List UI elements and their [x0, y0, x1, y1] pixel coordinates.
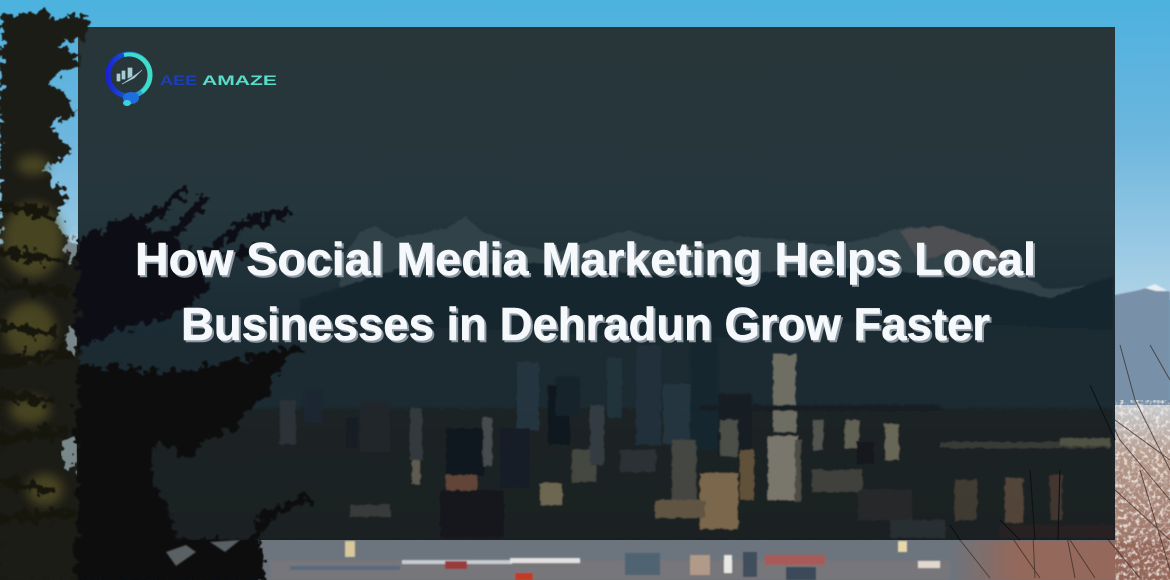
background: right side rosy foliage [1115, 405, 1170, 580]
background: base ground [0, 400, 1170, 580]
background: sky [0, 0, 1170, 300]
upper branch over panel [78, 192, 284, 352]
logo [108, 54, 277, 106]
background: speckled foliage texture [1115, 400, 1170, 580]
city skyline [80, 340, 1113, 538]
background: lower city strip [270, 541, 1170, 580]
title: Businesses in Dehradun Grow Faster [181, 298, 990, 350]
tree outside panel [0, 12, 88, 580]
frosted highlights at tree base [166, 540, 240, 566]
background: bare tree branches lower right [960, 345, 1170, 578]
lower branch over panel [76, 350, 307, 580]
bare branches inside panel [950, 385, 1115, 540]
logo wordmark: AEE [160, 72, 197, 88]
pine tree foreground [0, 12, 307, 580]
dark overlay panel [78, 27, 1115, 540]
logo ring icon [108, 54, 150, 106]
snowy mountain range [80, 216, 1113, 410]
dark sprigs over olive [0, 205, 72, 520]
pale gaps in tree [62, 232, 76, 470]
title [135, 233, 1036, 350]
olive highlights [3, 155, 63, 506]
tree base behind needles [0, 250, 78, 580]
background: distant hillside on right [1110, 284, 1170, 430]
logo: AMAZE [202, 72, 277, 88]
title: How Social Media Marketing Helps Local [135, 233, 1036, 285]
